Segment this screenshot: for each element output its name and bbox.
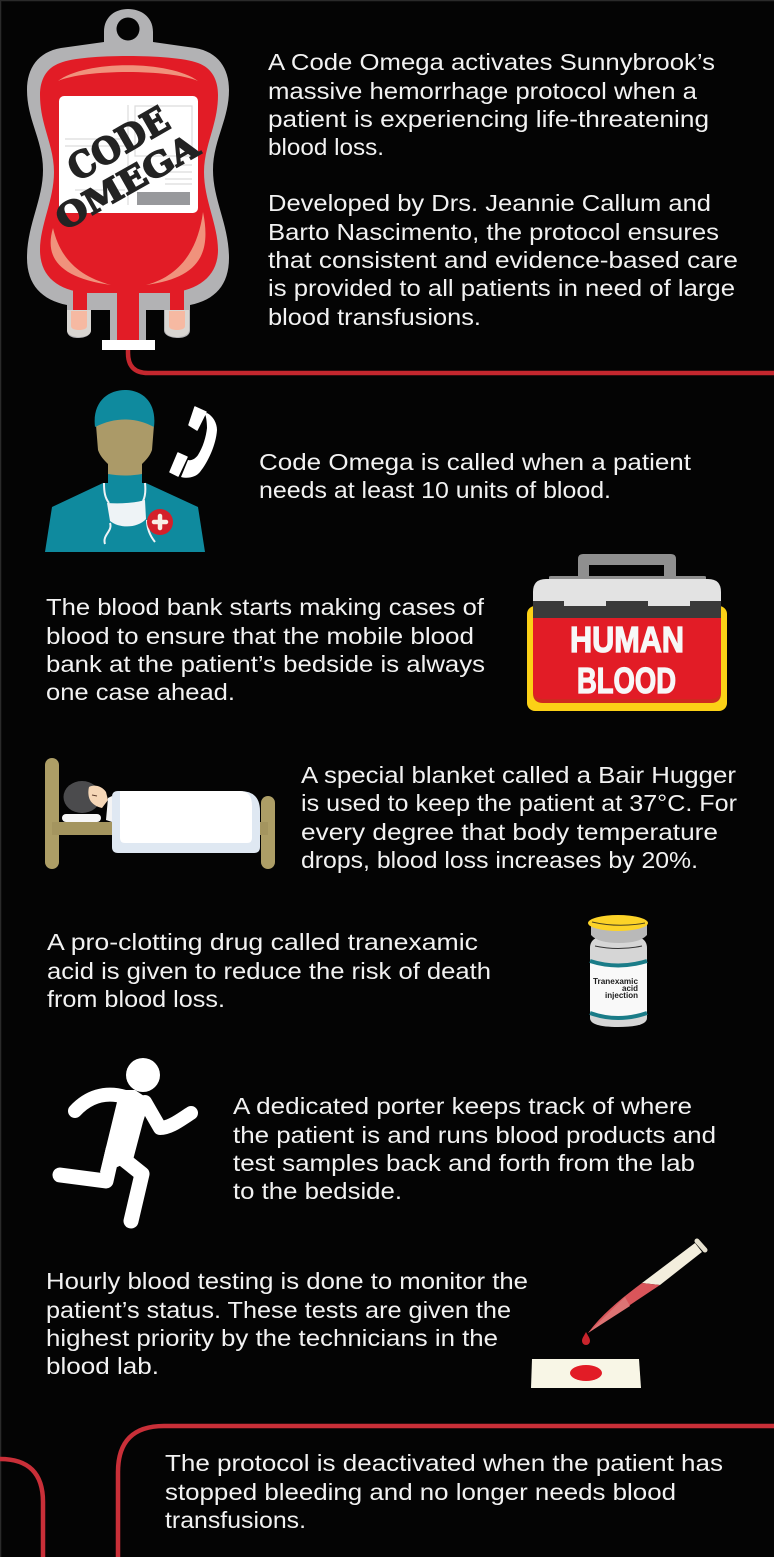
icon: medicine vial [588, 915, 648, 1027]
icon: running porter [60, 1058, 191, 1221]
text block: blood bank [46, 594, 485, 705]
text block: tranexamic acid: A pro-clotting drug called tranexamic [47, 929, 478, 955]
icon: patient in bed [45, 758, 275, 869]
text block: protocol deactivated: The protocol is deactivated when the patient has [165, 1450, 723, 1476]
icon: human blood cooler: BLOOD [577, 660, 676, 701]
text block: tranexamic acid: acid is given to reduce the risk of death [47, 958, 491, 984]
icon: pipette and blood slide [531, 1241, 705, 1388]
text block: introduction [268, 49, 738, 330]
text block: dedicated porter: the patient is and runs blood products and [233, 1122, 716, 1148]
text block: blood bank: blood to ensure that the mobile blood [46, 623, 474, 649]
icon: blood bag [27, 9, 229, 350]
red connector line: top [128, 350, 774, 373]
text block: hourly blood testing: blood lab. [46, 1353, 159, 1379]
text block: introduction: blood loss. [268, 134, 384, 160]
text block: introduction: is provided to all patients in need of large [268, 275, 735, 301]
text block: protocol deactivated: stopped bleeding and no longer needs blood [165, 1479, 676, 1505]
text block: dedicated porter: A dedicated porter keeps track of where [233, 1093, 692, 1119]
text block: protocol deactivated: transfusions. [165, 1507, 306, 1533]
text block: introduction: Developed by Drs. Jeannie Callum and [268, 190, 711, 216]
icon: human blood cooler: HUMAN [570, 619, 684, 660]
icon: medicine vial: Tranexamic [593, 977, 639, 986]
text block: Bair Hugger blanket [301, 762, 737, 873]
text block: when the code is called [259, 449, 692, 503]
text block: blood bank: one case ahead. [46, 679, 235, 705]
text block: tranexamic acid [47, 929, 491, 1012]
red connector line: bottom panel frame [118, 1426, 774, 1557]
text block: when the code is called: Code Omega is called when a patient [259, 449, 692, 475]
icon: doctor with phone [45, 390, 217, 552]
icon: medicine vial: injection [605, 991, 638, 1000]
text block: introduction: that consistent and evidence-based care [268, 247, 738, 273]
text block: dedicated porter: to the bedside. [233, 1178, 402, 1204]
text block: tranexamic acid: from blood loss. [47, 986, 225, 1012]
icon: blood bag: CODE [60, 98, 177, 190]
text block: blood bank: The blood bank starts making cases of [46, 594, 485, 620]
text block: blood bank: bank at the patient’s bedside is always [46, 651, 485, 677]
text block: introduction: A Code Omega activates Sunnybrook’s [268, 49, 715, 75]
text block: Bair Hugger blanket: is used to keep the patient at 37°C. For [301, 790, 737, 816]
text block: dedicated porter [233, 1093, 716, 1204]
text block: Bair Hugger blanket: every degree that body temperature [301, 819, 718, 845]
text block: introduction: patient is experiencing life-threatening [268, 106, 709, 132]
text block: Bair Hugger blanket: drops, blood loss increases by 20%. [301, 847, 698, 873]
text block: introduction: Barto Nascimento, the protocol ensures [268, 219, 719, 245]
text block: dedicated porter: test samples back and forth from the lab [233, 1150, 695, 1176]
icon: blood bag: OMEGA [49, 126, 206, 238]
text block: protocol deactivated [165, 1450, 723, 1533]
icon: human blood cooler [527, 554, 727, 711]
text block: hourly blood testing: patient’s status. These tests are given the [46, 1297, 511, 1323]
text block: introduction: blood transfusions. [268, 304, 481, 330]
text block: hourly blood testing [46, 1268, 528, 1379]
text block: Bair Hugger blanket: A special blanket called a Bair Hugger [301, 762, 736, 788]
red connector line: bottom left [0, 1459, 43, 1557]
text block: when the code is called: needs at least 10 units of blood. [259, 477, 611, 503]
text block: introduction: massive hemorrhage protocol when a [268, 78, 697, 104]
text block: hourly blood testing: Hourly blood testing is done to monitor the [46, 1268, 528, 1294]
text block: hourly blood testing: highest priority by the technicians in the [46, 1325, 498, 1351]
icon: medicine vial: acid [622, 984, 638, 993]
